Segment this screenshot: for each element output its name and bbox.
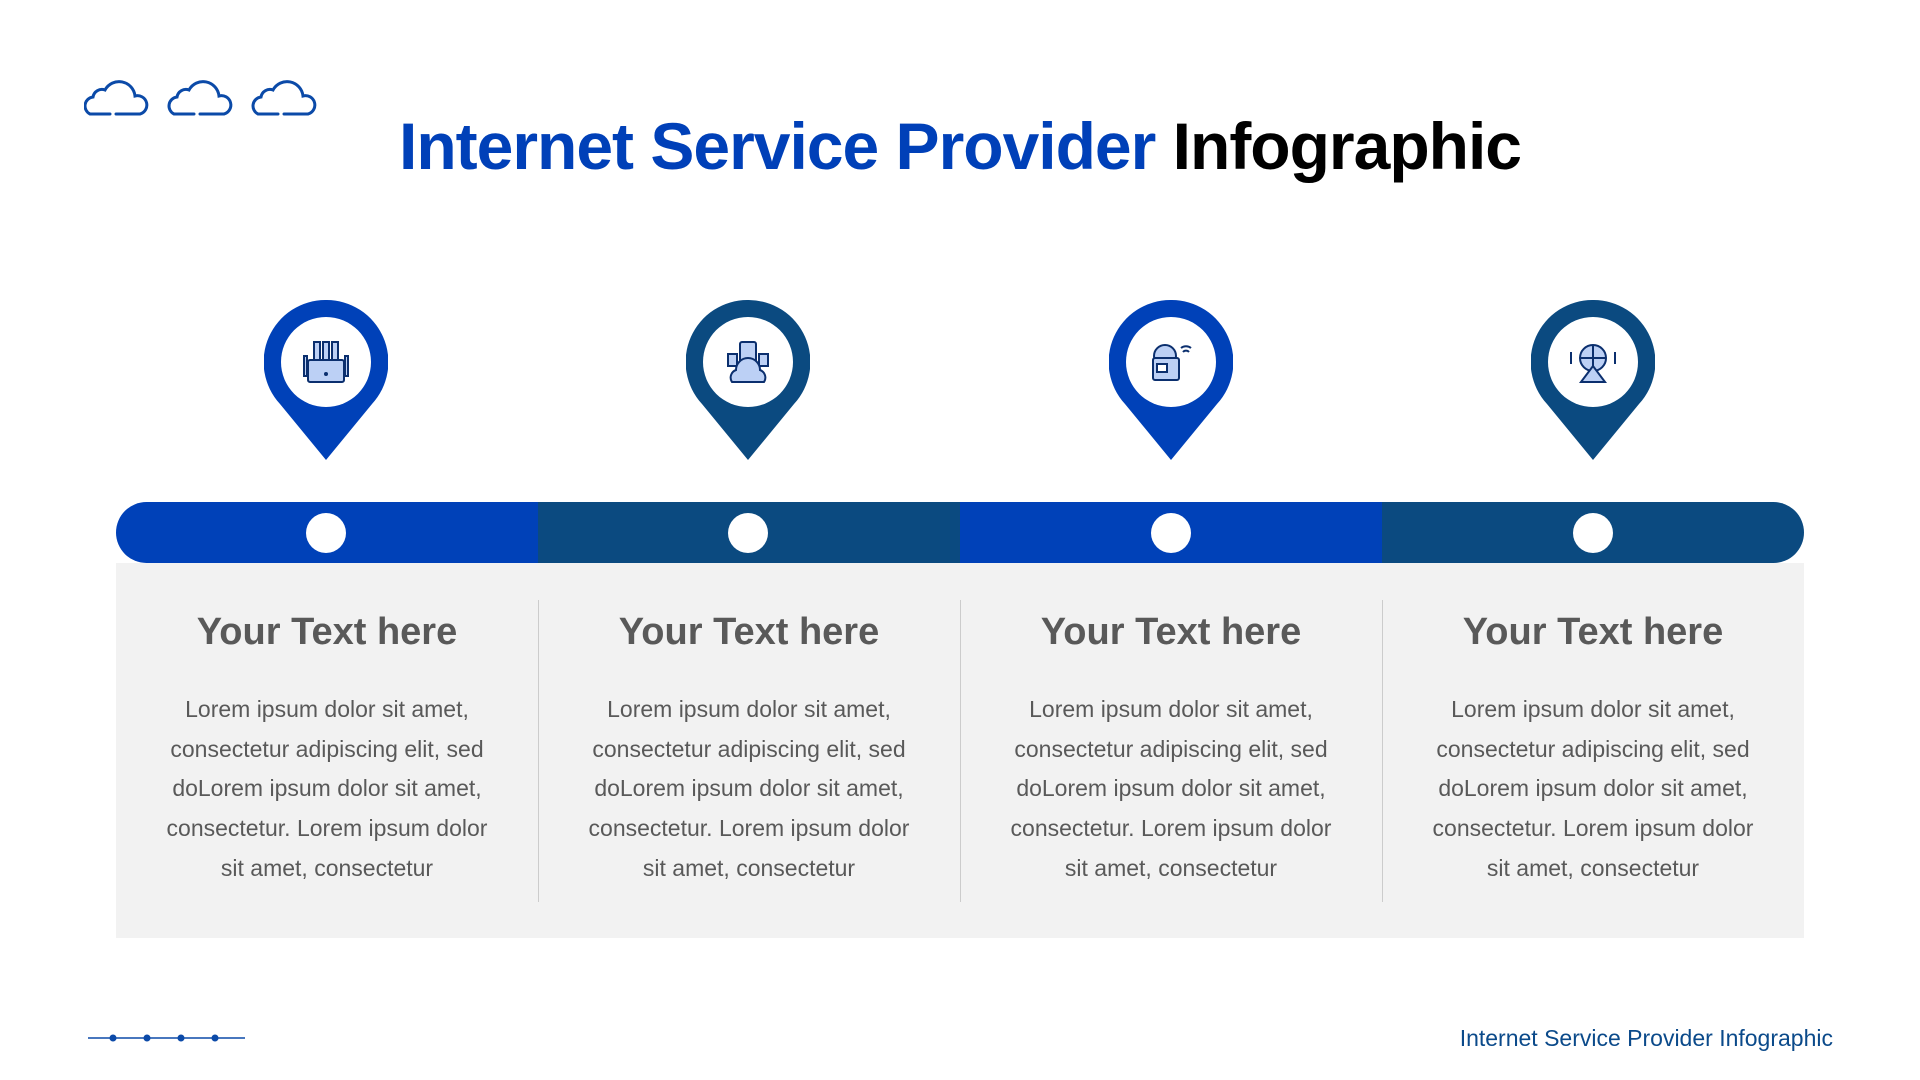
footer dots line — [88, 1034, 245, 1042]
text: sit amet, consectetur — [1065, 855, 1277, 881]
text: consectetur adipiscing elit, sed — [592, 736, 906, 762]
text: Your Text here — [619, 611, 879, 653]
text: consectetur adipiscing elit, sed — [1436, 736, 1750, 762]
title: Internet Service Provider Infographic — [399, 109, 1521, 183]
text: Your Text here — [1463, 611, 1723, 653]
text: consectetur. Lorem ipsum dolor — [167, 815, 487, 841]
text: consectetur adipiscing elit, sed — [170, 736, 484, 762]
text: Lorem ipsum dolor sit amet, — [185, 696, 469, 722]
pin 3 — [1109, 300, 1233, 460]
icon: clouds — [84, 80, 316, 116]
column 1 text — [167, 611, 488, 881]
column 3 text — [1011, 611, 1332, 881]
text: Your Text here — [1041, 611, 1301, 653]
text: Lorem ipsum dolor sit amet, — [1451, 696, 1735, 722]
text: Lorem ipsum dolor sit amet, — [607, 696, 891, 722]
footer text: Internet Service Provider Infographic — [1460, 1025, 1833, 1051]
gray panel — [116, 563, 1804, 938]
text: sit amet, consectetur — [221, 855, 433, 881]
pin 1 — [264, 300, 388, 460]
text: consectetur. Lorem ipsum dolor — [1433, 815, 1753, 841]
text: Your Text here — [197, 611, 457, 653]
text: sit amet, consectetur — [643, 855, 855, 881]
timeline bar — [116, 502, 1804, 563]
column 2 text — [589, 611, 910, 881]
text: Lorem ipsum dolor sit amet, — [1029, 696, 1313, 722]
text: doLorem ipsum dolor sit amet, — [172, 775, 482, 801]
text: consectetur. Lorem ipsum dolor — [1011, 815, 1331, 841]
text: doLorem ipsum dolor sit amet, — [1438, 775, 1748, 801]
pin 4 — [1531, 300, 1655, 460]
pin 2 — [686, 300, 810, 460]
text: consectetur. Lorem ipsum dolor — [589, 815, 909, 841]
text: doLorem ipsum dolor sit amet, — [594, 775, 904, 801]
timeline dots — [306, 513, 346, 553]
text: sit amet, consectetur — [1487, 855, 1699, 881]
text: doLorem ipsum dolor sit amet, — [1016, 775, 1326, 801]
column 4 text — [1433, 611, 1754, 881]
text: consectetur adipiscing elit, sed — [1014, 736, 1328, 762]
